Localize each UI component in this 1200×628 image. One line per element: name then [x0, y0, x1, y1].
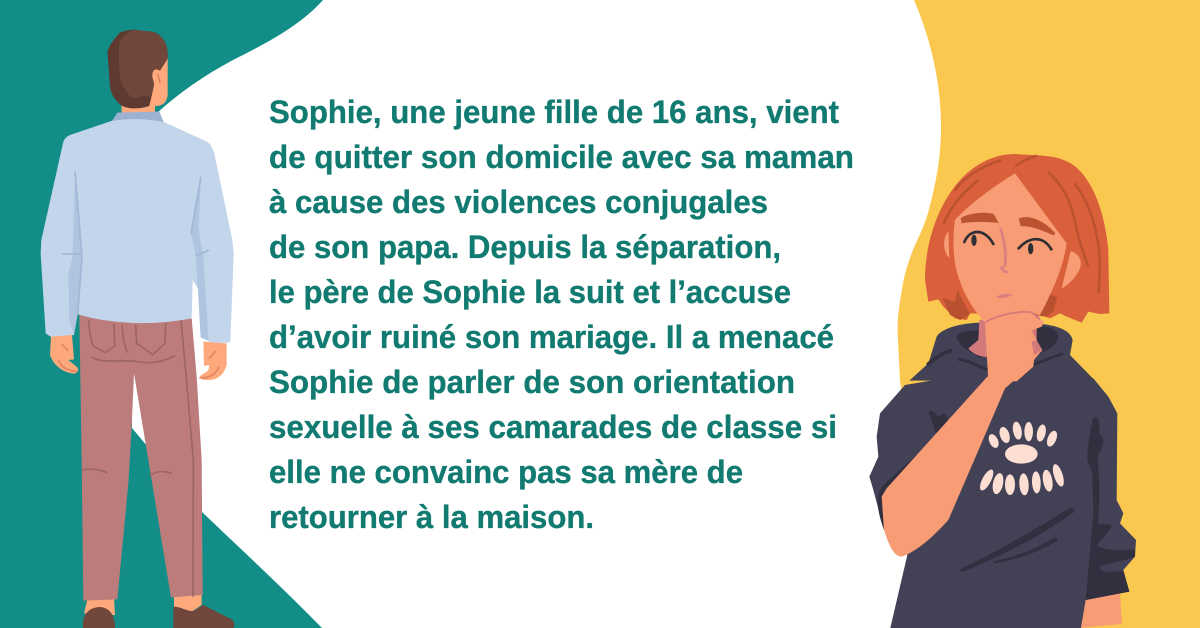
- eyes: [964, 232, 1051, 254]
- hoodie eye print: [977, 421, 1066, 496]
- body text: de son papa. Depuis la séparation,: [269, 229, 781, 265]
- collar: [112, 112, 164, 122]
- yellow background shape: [898, 0, 1200, 628]
- hood creases: [928, 351, 1062, 370]
- hoodie: [869, 370, 1136, 628]
- shoes: [83, 605, 235, 628]
- body text: Sophie de parler de son orientation: [269, 364, 795, 400]
- hair under-shadow: [943, 290, 1057, 320]
- man seen from behind: [41, 30, 235, 628]
- ankles: [84, 593, 202, 615]
- hair: [925, 154, 1109, 323]
- chin line: [985, 312, 1040, 322]
- right hand: [200, 342, 227, 380]
- thinking girl: [869, 154, 1136, 628]
- hair: [107, 30, 168, 108]
- hoodie body and sleeve: [869, 370, 1136, 628]
- trousers: [79, 315, 203, 601]
- hood interior: [957, 327, 1058, 358]
- body text: [269, 94, 854, 535]
- body text: le père de Sophie la suit et l’accuse: [269, 274, 791, 310]
- eyebrows: [961, 213, 1055, 235]
- body text: retourner à la maison.: [269, 499, 594, 535]
- teal background shape: [0, 0, 323, 628]
- body text: d’avoir ruiné son mariage. Il a menacé: [269, 319, 834, 355]
- chest creases: [960, 507, 1074, 572]
- hair strands: [944, 156, 1100, 292]
- trouser seams and pockets: [82, 321, 193, 596]
- man lower body: [50, 315, 235, 628]
- ear: [152, 69, 161, 85]
- mouth: [996, 294, 1013, 298]
- right ear: [1062, 251, 1081, 288]
- hood: [909, 323, 1095, 381]
- body text: Sophie, une jeune fille de 16 ans, vient: [269, 94, 839, 130]
- sleeve shading: [68, 172, 208, 340]
- nose: [1001, 229, 1007, 272]
- forearm: [882, 377, 1018, 557]
- left ear: [944, 232, 949, 258]
- shirt: [41, 119, 234, 344]
- left hand: [50, 335, 78, 374]
- neck: [968, 313, 1043, 357]
- body text: de quitter son domicile avec sa maman: [269, 139, 854, 175]
- exposed right wrist: [1080, 593, 1122, 628]
- head, hair and hand: [909, 154, 1109, 381]
- body text: à cause des violences conjugales: [269, 184, 768, 220]
- sleeve folds: [1086, 417, 1135, 600]
- elbow crease: [928, 411, 948, 437]
- man upper body: [41, 30, 234, 344]
- body text: sexuelle à ses camarades de classe si: [269, 409, 837, 445]
- shirt seams: [63, 172, 209, 315]
- face: [953, 173, 1067, 323]
- neck and face: [122, 57, 168, 115]
- body text: elle ne convainc pas sa mère de: [269, 454, 743, 490]
- hand and fist: [985, 312, 1044, 381]
- finger shadows: [1032, 340, 1042, 355]
